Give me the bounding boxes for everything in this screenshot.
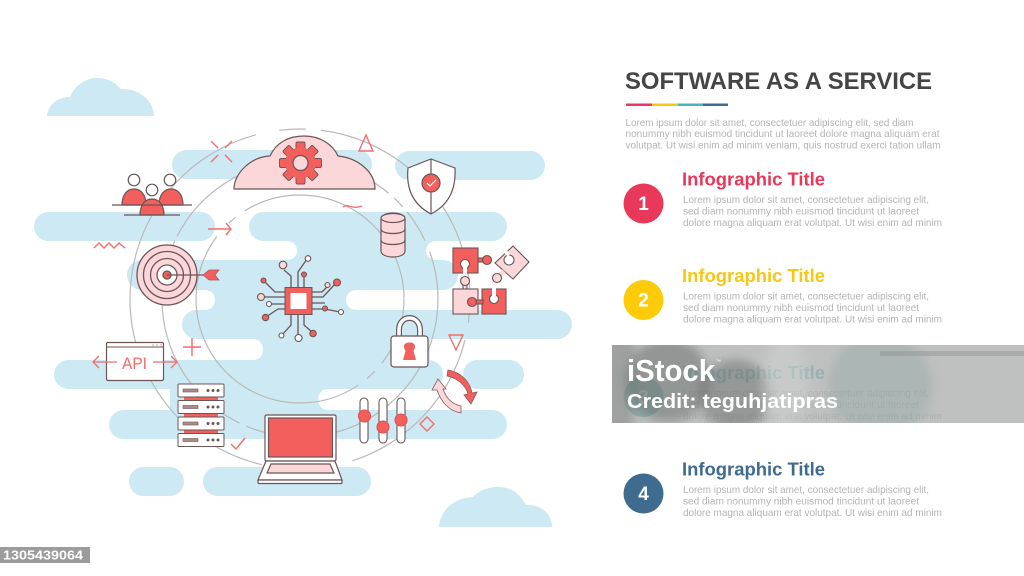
item 1: dolore magna aliquam erat volutpat. Ut wisi enim ad minim [683, 218, 942, 229]
item 2 [624, 266, 942, 326]
intro paragraph: nonummy nibh euismod tincidunt ut laoreet dolore magna aliquam erat [626, 129, 940, 140]
item 4: Infographic Title [682, 460, 825, 480]
icon: database [381, 213, 405, 257]
item 2: sed diam nonummy nibh euismod tincidunt ut laoreet [683, 303, 919, 314]
cloud bottom right [439, 487, 552, 527]
icon: cycle arrows [432, 370, 477, 413]
watermark banner: ™ [716, 359, 721, 365]
icon: padlock [391, 318, 428, 367]
item 4: 4 [638, 484, 649, 505]
icon: laptop [258, 415, 342, 484]
icon: circuit chip [258, 256, 344, 342]
item 4: Lorem ipsum dolor sit amet, consectetuer adipiscing elit, [683, 485, 929, 496]
item 1: sed diam nonummy nibh euismod tincidunt ut laoreet [683, 206, 919, 218]
item 3: Lorem ipsum dolor sit amet, consectetuer adipiscing elit, [683, 388, 929, 400]
cloud top left [47, 78, 154, 116]
watermark banner [612, 345, 1024, 423]
intro paragraph: volutpat. Ut wisi enim ad minim veniam, quis nostrud exerci tation ullam [626, 140, 940, 152]
icon: API window: API [122, 354, 147, 373]
item 2: Lorem ipsum dolor sit amet, consectetuer adipiscing elit, [683, 292, 929, 302]
item 1: 1 [638, 194, 649, 215]
item 2: 2 [638, 290, 649, 312]
icon: people [112, 174, 192, 215]
item 3: 3 [638, 388, 649, 408]
item 3: Infographic Title [682, 363, 825, 383]
background cloud bands [34, 150, 572, 496]
icon: API window [93, 342, 177, 380]
item 3: dolore magna aliquam erat volutpat. Ut wisi enim ad minim [683, 412, 942, 422]
icon: sliders [358, 398, 407, 443]
title color bar [626, 104, 728, 106]
watermark banner: Credit: teguhjatipras [627, 391, 838, 413]
icon: puzzle pieces [453, 246, 529, 314]
icon: cloud gear [234, 136, 375, 189]
intro paragraph: Lorem ipsum dolor sit amet, consectetuer adipiscing elit, sed diam [626, 118, 914, 129]
item 4 [624, 460, 942, 519]
watermark banner: iStock [627, 353, 716, 388]
icon: shield [408, 159, 455, 214]
item 4: sed diam nonummy nibh euismod tincidunt ut laoreet [683, 496, 919, 508]
item 4: dolore magna aliquam erat volutpat. Ut wisi enim ad minim [683, 508, 942, 519]
item 2: Infographic Title [682, 266, 825, 286]
icon: target [137, 245, 219, 305]
item 1: Infographic Title [682, 170, 825, 190]
icon: server rack [178, 384, 224, 446]
item 2: dolore magna aliquam erat volutpat. Ut wisi enim ad minim [683, 314, 942, 326]
item 1 [624, 170, 942, 229]
image id tag: 1305439064 [3, 548, 83, 562]
concentric rings [130, 129, 470, 469]
item 3 [624, 363, 942, 422]
main title: SOFTWARE AS A SERVICE [625, 68, 932, 95]
image id tag [0, 547, 90, 563]
decorative accents [94, 135, 463, 449]
item 3: sed diam nonummy nibh euismod tincidunt ut laoreet [683, 400, 919, 411]
intro paragraph [626, 118, 940, 152]
item 1: Lorem ipsum dolor sit amet, consectetuer adipiscing elit, [683, 195, 929, 206]
